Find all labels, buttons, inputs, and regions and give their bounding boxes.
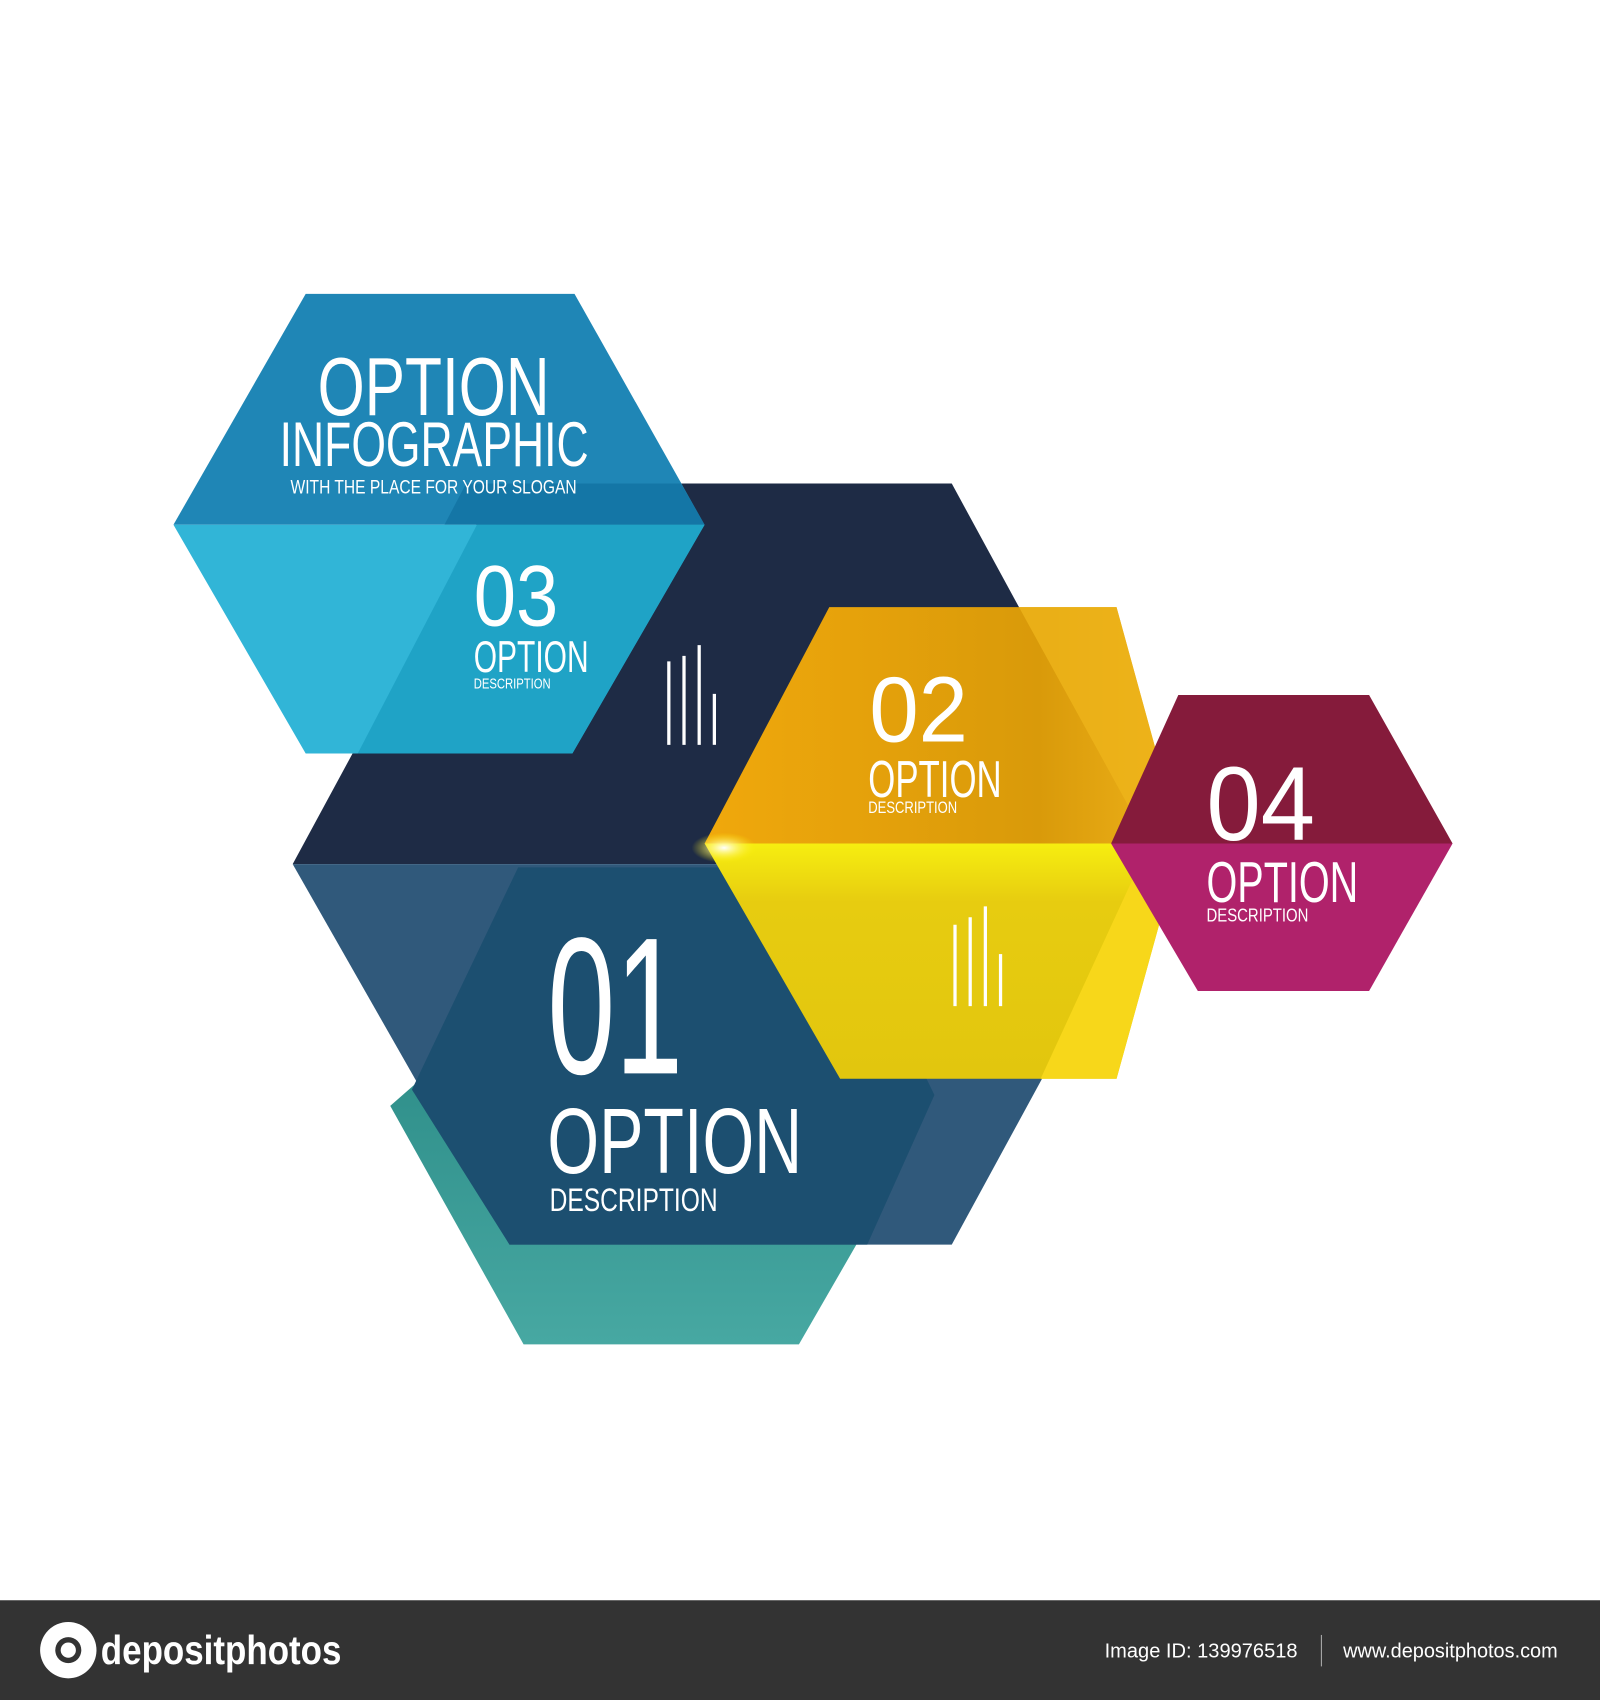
text: option 01 [547,897,802,1218]
footer text: www.depositphotos.com [1342,1640,1558,1663]
text: option 02: 02 [869,658,968,762]
title block: OPTION [318,341,550,433]
footer bar [0,1600,1600,1700]
footer text: Image ID: 139976518 [1105,1640,1298,1663]
text: option 01: OPTION [547,1089,802,1193]
hex: yellow 02 [692,607,1182,1079]
icon: bars yellow [955,906,1001,1006]
hex: navy 01 [293,484,1159,1245]
title block: INFOGRAPHIC [280,410,589,480]
footer text [1105,1635,1558,1666]
text: option 01: DESCRIPTION [550,1182,718,1218]
text: option 04: OPTION [1207,851,1358,915]
logo [40,1622,341,1678]
text: option 02 [868,658,1002,817]
title block: WITH THE PLACE FOR YOUR SLOGAN [291,476,577,498]
text: option 04: DESCRIPTION [1207,905,1308,926]
text: option 03: OPTION [474,633,589,682]
hex: magenta 04 [1111,695,1453,991]
text: option 04 [1207,746,1358,926]
title block [280,341,589,498]
text: option 01: 01 [547,897,683,1115]
text: option 02: DESCRIPTION [868,799,957,817]
text: option 03 [474,548,589,692]
hex: teal/blue 03 [173,294,705,754]
text: option 02: OPTION [868,751,1002,809]
icon: bars navy [669,645,714,745]
text: option 03: DESCRIPTION [474,675,551,692]
logo: depositphotos [101,1627,341,1673]
text: option 03: 03 [474,548,558,645]
text: option 04: 04 [1207,746,1315,863]
hex: teal base [390,1068,856,1344]
